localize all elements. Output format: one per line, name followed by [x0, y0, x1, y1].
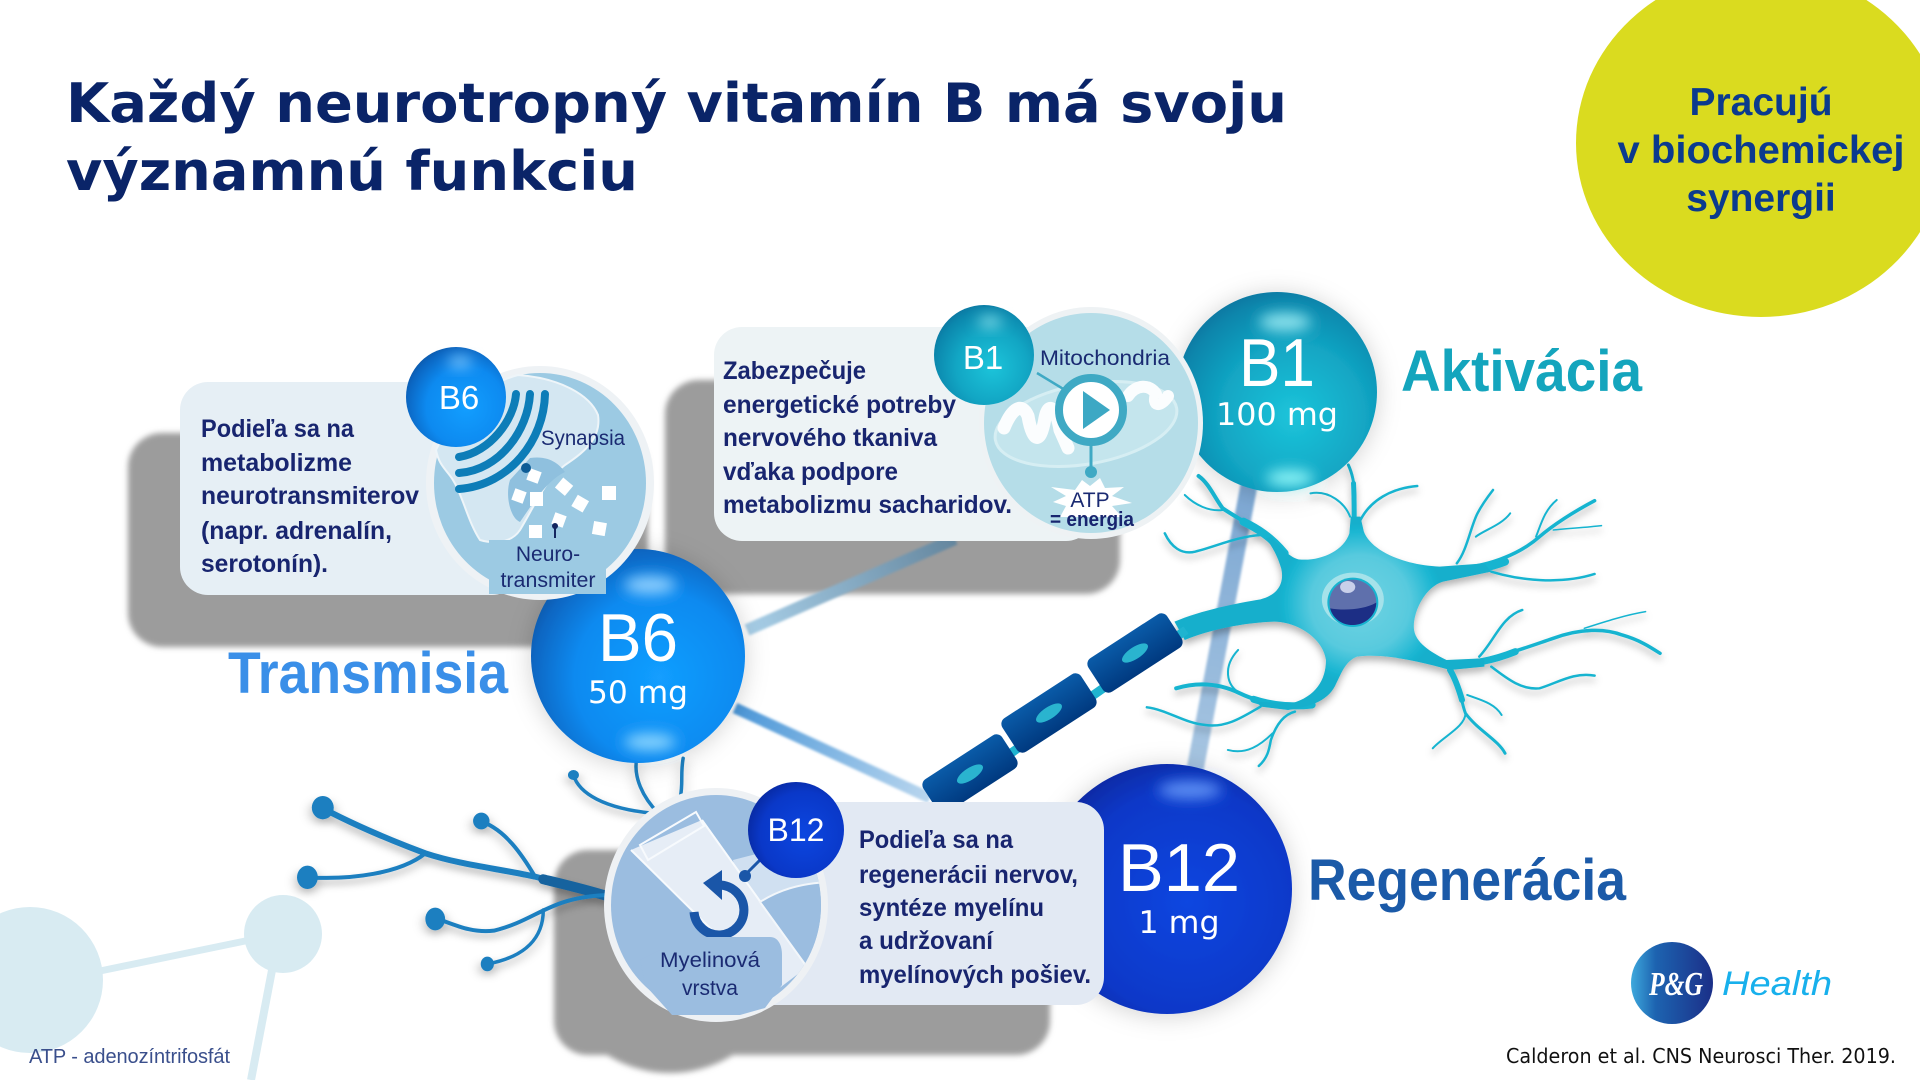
- label: Regenerácia: Regenerácia: [1308, 848, 1627, 913]
- decoration: molecule circles bottom left: [0, 895, 322, 1080]
- vitamin bubble: B6 50 mg: 50 mg: [588, 675, 688, 711]
- footnote: ATP abbreviation: ATP - adenozíntrifosfát: [29, 1046, 230, 1068]
- callout: synergy yellow circle: Pracujú: [1689, 81, 1833, 124]
- myelin diagram: vrstva: [682, 977, 738, 1000]
- vitamin bubble: B6 50 mg: B6: [598, 600, 678, 676]
- label: Transmisia: Transmisia: [228, 641, 509, 706]
- text block: B12 description: Podieľa sa na: [859, 826, 1014, 854]
- panel background: [180, 382, 520, 595]
- gray shadows behind panels: [128, 380, 1120, 1073]
- vitamin bubble: B1 100 mg: 100 mg: [1216, 397, 1338, 433]
- logo: P&G Health: Health: [1722, 965, 1832, 1003]
- text block: B1 description: [723, 357, 1012, 519]
- small bubble: B6: B6: [439, 379, 479, 416]
- text block: B1 description: energetické potreby: [723, 391, 956, 419]
- text block: B12 description: a udržovaní: [859, 927, 994, 955]
- neuron cell: [1147, 465, 1660, 766]
- text block: B12 description: regenerácii nervov,: [859, 861, 1078, 889]
- synapse diagram: Synapsia: [541, 427, 625, 450]
- title: významnú funkciu: [66, 140, 638, 203]
- text block: B12 description: [859, 826, 1091, 989]
- text block: B12 description: myelínových pošiev.: [859, 961, 1091, 989]
- panel: B6 transmission: [180, 347, 654, 600]
- callout: synergy yellow circle: [1576, 0, 1920, 317]
- small bubble: B1: B1: [963, 339, 1003, 376]
- title: [66, 72, 1287, 203]
- text block: B1 description: Zabezpečuje: [723, 357, 866, 385]
- panel: B1 activation: [714, 305, 1203, 541]
- logo: P&G Health: P&G: [1648, 966, 1703, 1003]
- mitochondria diagram: = energia: [1050, 509, 1135, 531]
- mitochondria diagram: Mitochondria: [1040, 347, 1170, 370]
- vitamin bubble: B12 1 mg: [1042, 764, 1292, 1014]
- title: Každý neurotropný vitamín B má svoju: [66, 72, 1287, 135]
- citation: Calderon et al. CNS Neurosci Ther. 2019.: [1506, 1044, 1896, 1068]
- icon: play button: [1059, 378, 1123, 442]
- small bubble: B12: [748, 782, 844, 878]
- vitamin bubble: B6 50 mg: [531, 549, 745, 763]
- logo: P&G Health: [1631, 942, 1832, 1024]
- panel background: [714, 327, 1094, 541]
- vitamin bubble: B12 1 mg: 1 mg: [1138, 905, 1220, 941]
- synapse diagram: Neuro-: [516, 543, 580, 566]
- mitochondria diagram: [979, 307, 1203, 539]
- text block: B1 description: vďaka podpore: [723, 458, 898, 486]
- synapse diagram: [426, 366, 654, 600]
- text block: B1 description: metabolizmu sacharidov.: [723, 491, 1012, 519]
- text block: B12 description: syntéze myelínu: [859, 894, 1044, 922]
- text block: B6 description: Podieľa sa na: [201, 415, 355, 443]
- panel: B12 regeneration: [604, 782, 1104, 1022]
- myelin diagram: Myelinová: [660, 949, 760, 972]
- text block: B6 description: [201, 415, 419, 578]
- panel background: [720, 802, 1104, 1005]
- text block: B6 description: metabolizme: [201, 449, 352, 477]
- text block: B6 description: (napr. adrenalín,: [201, 517, 392, 545]
- synapse diagram: transmiter: [500, 569, 596, 592]
- icon: circular regeneration arrow: [694, 855, 765, 935]
- callout: synergy yellow circle: synergii: [1686, 177, 1836, 220]
- vitamin bubble: B12 1 mg: B12: [1118, 830, 1240, 906]
- text block: B6 description: serotonín).: [201, 550, 328, 578]
- text block: B1 description: nervového tkaniva: [723, 424, 938, 452]
- small bubble: B1: [934, 305, 1034, 405]
- small bubble: B6: [406, 347, 506, 447]
- vitamin bubble: B1 100 mg: B1: [1239, 325, 1315, 401]
- text block: B6 description: neurotransmiterov: [201, 482, 419, 510]
- axon terminal branches: [297, 758, 683, 971]
- connector lines between vitamins: [735, 480, 1250, 798]
- label: Aktivácia: Aktivácia: [1401, 339, 1643, 404]
- axon with myelin segments: [920, 611, 1186, 816]
- myelin diagram: [604, 788, 830, 1022]
- vitamin bubble: B1 100 mg: [1177, 292, 1377, 492]
- small bubble: B12: B12: [768, 812, 824, 848]
- mitochondria diagram: ATP: [1070, 489, 1110, 512]
- callout: synergy yellow circle: v biochemickej: [1618, 129, 1904, 172]
